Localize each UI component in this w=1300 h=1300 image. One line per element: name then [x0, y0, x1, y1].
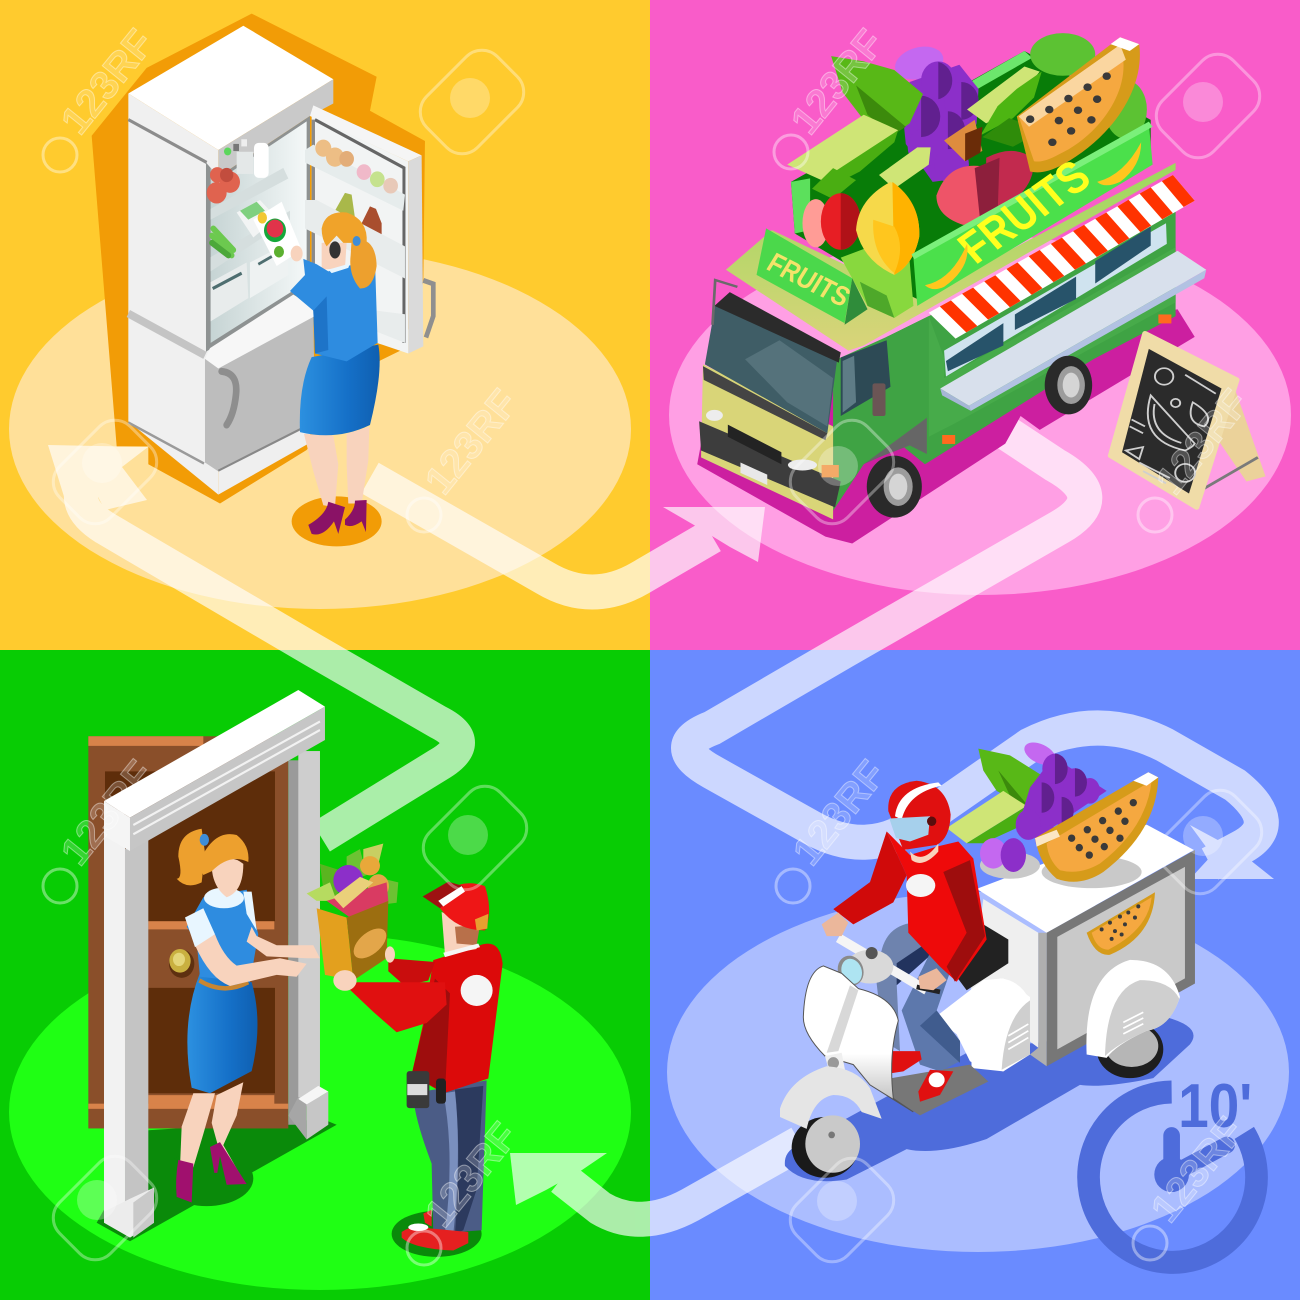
lintel top	[104, 690, 325, 818]
door top edge	[310, 105, 422, 161]
scooter badge	[825, 1053, 845, 1075]
back of fruit crate	[791, 51, 1151, 306]
door lower trays	[305, 200, 405, 343]
skirt	[187, 973, 257, 1093]
sign text: FRUITS	[948, 151, 1101, 273]
cherry and peach	[802, 168, 861, 250]
awning	[929, 175, 1195, 339]
wing mirror	[872, 383, 886, 416]
jacket	[412, 944, 503, 1093]
door frame	[104, 690, 328, 1238]
lower fridge front	[205, 312, 315, 471]
route segment: pink to blue	[688, 430, 1274, 879]
side mirror arm	[713, 280, 737, 325]
greens box	[237, 200, 277, 237]
front wheel	[867, 456, 922, 518]
front side fender	[971, 978, 1030, 1071]
scooter side body	[935, 978, 1030, 1071]
side lamps	[942, 314, 1171, 444]
cab side window	[841, 340, 890, 416]
right post	[288, 760, 299, 1125]
front fender	[780, 1066, 882, 1129]
cargo box	[970, 825, 1195, 1066]
door outer handle	[423, 280, 433, 337]
collar	[328, 264, 350, 273]
scooter ground shadow	[785, 1017, 1194, 1181]
neck and phone	[322, 241, 347, 270]
sign brace	[1204, 457, 1258, 488]
pale green slices	[787, 66, 1040, 185]
lintel left edge	[104, 801, 130, 851]
box right face	[1047, 850, 1195, 1066]
door	[88, 736, 288, 1128]
fridge body	[128, 26, 433, 495]
watermark text: 123RF	[783, 22, 893, 143]
clock ring	[1089, 1092, 1257, 1262]
panel: blue quadrant background	[650, 650, 1300, 1300]
front sign	[757, 228, 868, 325]
fruit on box	[947, 738, 1158, 888]
neck	[442, 912, 477, 955]
handlebar grip	[917, 987, 940, 992]
fruit pile	[787, 33, 1147, 318]
panel: yellow quadrant background	[0, 0, 650, 650]
hair	[177, 829, 249, 885]
box logo: melon	[1087, 892, 1155, 955]
fridge left side	[128, 94, 218, 495]
collar	[443, 943, 480, 957]
truck ground shadow	[697, 309, 1195, 543]
top shelf	[211, 168, 288, 220]
cap	[423, 882, 489, 930]
front shield	[803, 966, 913, 1112]
rider collar	[910, 843, 938, 863]
lintel front	[130, 707, 325, 851]
watermark text: 123RF	[417, 382, 527, 503]
floor ellipse: yellow	[9, 249, 631, 609]
rider	[833, 781, 987, 1102]
near arm	[350, 982, 447, 1032]
near arm	[195, 934, 307, 986]
lower fridge top edge	[205, 295, 315, 369]
collar	[204, 888, 244, 908]
paper bag	[317, 901, 391, 980]
box top	[977, 825, 1194, 933]
hair	[322, 212, 377, 289]
legs	[180, 1082, 243, 1180]
rear greens	[1030, 33, 1147, 139]
sleeves	[185, 892, 257, 947]
woman at door	[176, 829, 320, 1202]
man with bag	[307, 844, 503, 1251]
egg and jars tray	[305, 140, 405, 211]
route segment: blue to green	[510, 1143, 800, 1219]
sneakers	[402, 1210, 468, 1251]
handlebars	[822, 913, 947, 992]
sign frame	[1111, 333, 1237, 507]
watermelon	[1017, 37, 1140, 172]
watermark text: 123RF	[1148, 382, 1258, 503]
rider badge	[906, 874, 935, 897]
rear wheel	[1097, 1021, 1163, 1078]
shadows on box	[980, 852, 1142, 888]
rider far leg	[877, 923, 943, 1051]
hands	[333, 946, 395, 991]
leaves	[947, 749, 1045, 843]
fridge shadow	[92, 14, 425, 504]
grapes	[890, 41, 979, 184]
right base block	[288, 1086, 328, 1140]
cucumbers	[212, 229, 233, 255]
door side edge	[408, 155, 423, 354]
helmet	[888, 781, 951, 850]
fridge top front	[218, 79, 333, 177]
headlights	[706, 410, 839, 477]
window frame	[944, 223, 1167, 376]
skirt	[300, 345, 380, 435]
headlight	[834, 952, 868, 989]
door inner	[312, 116, 408, 354]
legs	[413, 1080, 487, 1234]
front sign text: FRUITS	[761, 248, 855, 313]
melon slice	[1035, 772, 1158, 882]
scene: door handover	[88, 690, 503, 1257]
left post	[104, 801, 125, 1223]
lower fridge handle	[222, 371, 236, 425]
truck body	[887, 192, 1176, 464]
fruit in bag	[307, 844, 398, 918]
watermark text: 123RF	[417, 1115, 527, 1236]
rider far arm	[833, 831, 907, 924]
woman at fridge	[253, 202, 380, 535]
jacket	[290, 259, 378, 361]
left base block	[104, 1188, 154, 1238]
fridge opening	[206, 116, 310, 352]
chalk drawing	[1126, 368, 1216, 483]
watermark text: 123RF	[53, 22, 163, 143]
door rails	[88, 921, 288, 1109]
open door	[305, 105, 433, 354]
visor band	[714, 292, 841, 363]
apples	[936, 120, 1033, 225]
watermark camera icons	[43, 135, 1172, 1265]
shoes	[308, 500, 367, 535]
top	[187, 890, 258, 982]
lower greens	[841, 249, 913, 318]
box panel	[1057, 867, 1185, 1049]
mudguard	[864, 418, 927, 464]
wiper band	[703, 366, 827, 440]
box left face	[970, 899, 1038, 1048]
panel: pink quadrant background	[650, 0, 1300, 650]
front wheel	[792, 1115, 860, 1178]
fridge control lights	[224, 139, 247, 155]
floorboard	[892, 1065, 988, 1115]
floor ellipse: blue	[667, 892, 1289, 1252]
sign back leg	[1216, 378, 1266, 481]
rear wheel	[1045, 356, 1092, 414]
legs	[304, 427, 369, 507]
clock hub	[1154, 1157, 1189, 1192]
woman floor shadow	[292, 496, 382, 546]
seat	[957, 924, 1008, 990]
grapes	[980, 738, 1107, 872]
hair	[455, 925, 480, 945]
bottles in door	[335, 193, 382, 241]
door panels	[105, 771, 275, 1093]
far arm	[247, 927, 320, 958]
fridge base	[218, 425, 310, 495]
rider near shoe	[918, 1070, 953, 1102]
windows	[946, 227, 1151, 371]
clock hands	[1172, 1136, 1227, 1174]
truck lower band	[929, 247, 1176, 437]
handle centre	[847, 950, 893, 984]
middle shelf	[211, 211, 290, 271]
floor ellipse: pink	[669, 235, 1291, 595]
chalkboard sign	[1111, 333, 1266, 507]
watermark text: 123RF	[1143, 1110, 1253, 1231]
side sign	[912, 122, 1153, 306]
crisper drawers	[211, 243, 288, 321]
door knob	[169, 949, 194, 978]
far arm	[388, 958, 435, 986]
watermark text: 123RF	[53, 753, 163, 874]
rider near leg	[902, 946, 960, 1071]
belt	[199, 980, 248, 988]
hand	[291, 246, 303, 261]
floor ellipse: green	[9, 934, 631, 1290]
belt scanner	[407, 1071, 446, 1108]
windshield	[705, 306, 837, 433]
minutes label: 10'	[1178, 1072, 1252, 1141]
clock icon	[1089, 1072, 1257, 1262]
fridge interior wall	[211, 121, 307, 343]
scene: fridge and woman	[92, 14, 433, 546]
rider hands	[822, 913, 947, 990]
route segment: green to yellow	[48, 445, 458, 837]
big leaves	[831, 56, 923, 135]
route segment: yellow to pink	[370, 478, 765, 592]
leaves centre	[980, 72, 1044, 147]
scene: food truck	[697, 33, 1266, 543]
roof	[726, 163, 1176, 351]
rider far shoe	[892, 1051, 922, 1073]
bumper and grille	[699, 421, 841, 507]
panel: green quadrant background	[0, 650, 650, 1300]
lemon	[856, 147, 931, 275]
fridge top	[128, 26, 333, 150]
rear fender	[1086, 960, 1180, 1058]
blackboard	[1122, 349, 1222, 494]
cab front	[701, 364, 833, 519]
tomatoes	[207, 167, 240, 204]
rider jacket	[887, 831, 987, 982]
woman floor shadow	[160, 1151, 253, 1206]
sign bananas	[925, 142, 1141, 289]
watermark text: 123RF	[785, 753, 895, 874]
leaflet	[253, 202, 302, 266]
door shadow	[97, 1119, 337, 1241]
route: delivery flow arrows	[48, 430, 1274, 1219]
shoes	[176, 1142, 247, 1202]
cab side	[833, 316, 929, 511]
face	[212, 858, 243, 897]
bottles on top shelf	[237, 143, 269, 178]
jacket badge	[461, 975, 493, 1006]
watermark egg yolks	[77, 78, 1223, 1221]
man floor shadow	[392, 1211, 482, 1257]
scene: delivery scooter	[780, 738, 1257, 1262]
service counter	[940, 251, 1206, 411]
